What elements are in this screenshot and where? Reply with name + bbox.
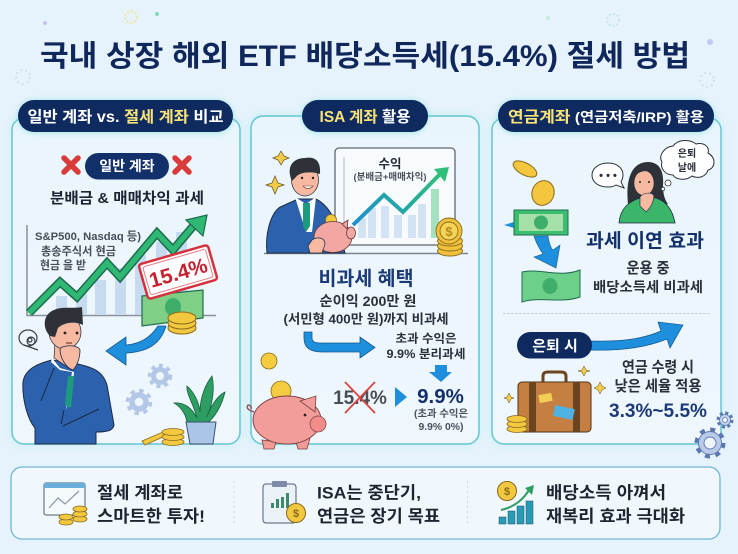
heading: ISA [302,100,428,133]
icon: cash and coins [142,290,203,334]
illustration: piggy bank and coins [247,353,326,449]
text: tax-free during operation: 운용 중 [626,260,670,277]
chart board: profit: 수익 [378,157,402,171]
text: compounding: 재복리 효과 극대화 [546,507,685,526]
stamp: 15.4%: 15.4% [147,254,211,293]
arrow: blue elbow [304,332,375,358]
chart note: S&P500, Nasdaq 등) [35,230,141,243]
text: excess profit: 9.9% 분리과세 [386,346,466,361]
icon: corner gears [696,413,732,456]
label: general account [85,153,169,180]
text: excess profit: 초과 수익은 [396,330,456,346]
illustration: thinking woman [619,162,675,223]
heading: comparison [18,100,233,133]
chart board: profit [335,148,455,245]
text: low tax rate at pension receipt: 연금 수령 시 [622,359,694,376]
text: mid-term and long-term: ISA는 중단기, [317,484,421,502]
text: low tax rate at pension receipt: 낮은 세율 적용 [614,378,702,395]
speech bubble: • • • [599,170,617,182]
icon: potted plant [174,376,225,444]
panel: ISA account [247,100,479,449]
icon: gear lower [128,390,150,414]
thought bubble: retirement: 은퇴 [678,148,696,160]
text: tax-free limit [284,293,448,326]
arrow: blue down [429,365,452,382]
note: 9.9% 0%: 9.9% 0%) [418,422,464,433]
text: dividend and capital gains tax: 분배금 & 매매차익 과세 [50,190,204,207]
icon: cash [504,210,568,235]
line chart with rising arrow [27,215,216,316]
icon: clipboard with coin: $ [293,508,299,520]
text: tax-free limit: (서민형 400만 원)까지 비과세 [284,312,448,326]
icon: chart window with coins [44,483,87,525]
note: 9.9% 0%: (초과 수익은 [414,407,468,420]
text: smart investing: 절세 계좌로 [97,484,183,502]
icon: red x left [64,158,78,172]
text: compounding [546,484,685,526]
dashed divider [503,312,710,314]
arrow: triangle [395,387,407,407]
label: at retirement: 은퇴 시 [532,338,578,355]
chart note: 현금 을 받 [40,258,87,272]
icon: coins on floor [142,428,184,446]
rate: 9.9%: 9.9% [417,385,464,408]
heading: pension: 연금계좌 (연금저축/IRP) 활용 [508,108,704,126]
arrow: blue down [534,236,560,268]
label: at retirement [517,332,592,358]
label: general account: 일반 계좌 [99,158,155,174]
text: tax-free during operation: 배당소득세 비과세 [593,279,703,295]
icon: falling coins [511,158,558,209]
speech bubble [592,163,624,188]
note: 9.9% 0% [414,407,468,433]
illustration: man with piggy bank [267,158,356,253]
icon: tangled thought [19,330,38,350]
text: mid-term and long-term: 연금은 장기 목표 [317,507,440,526]
text: mid-term and long-term [317,484,440,526]
icon: red x right [175,158,189,172]
icon: coin with growth bars: $ [504,486,510,498]
crossed out 15.4%: 15.4% [333,388,387,409]
crossed out 15.4% [333,382,387,413]
panel: bottom summary [11,467,720,539]
arrow: blue curved [590,322,683,350]
thought bubble: retirement [661,140,714,191]
title: 국내 상장 해외 ETF 배당소득세(15.4%) 절세 방법 [40,40,690,73]
text: tax-free limit: 순이익 200만 원 [320,293,416,309]
text: tax-free during operation [593,260,703,295]
heading: ISA: ISA 계좌 활용 [320,108,410,126]
heading: pension [498,100,714,133]
heading: tax-free benefit: 비과세 혜택 [318,268,414,290]
text: excess profit [386,330,466,361]
heading: deferred tax: 과세 이연 효과 [586,230,704,252]
illustration: suitcase [504,366,606,432]
text: compounding: 배당소득 아껴서 [546,484,666,502]
icon: coin stack: $ [445,224,453,239]
text: smart investing: 스마트한 투자! [97,507,205,526]
chart note [35,230,141,272]
icon: cash lower [522,270,580,302]
panel: pension account [492,100,721,444]
icon: coin stack [436,218,462,256]
illustration: thinking man [23,307,114,444]
icon: sparkles [266,151,289,194]
rate: 3.3%~5.5%: 3.3%~5.5% [609,401,707,422]
text: smart investing [97,484,205,526]
baseline [264,252,468,254]
icon: coin with growth bars [498,482,534,524]
stamp: 15.4% [138,245,218,299]
heading: comparison: 일반 계좌 vs. 절세 계좌 비교 [28,108,224,126]
chart board: profit: (분배금+매매차익) [353,171,427,183]
icon: gear upper [150,366,170,386]
icon: clipboard with coin [263,481,306,523]
chart note: 총송주식서 현금 [41,244,116,258]
panel: general vs tax-saving account comparison [12,100,240,446]
arrow: blue curved [106,326,166,365]
text: low tax rate at pension receipt [614,359,702,395]
thought bubble: retirement: 날에 [678,161,696,174]
